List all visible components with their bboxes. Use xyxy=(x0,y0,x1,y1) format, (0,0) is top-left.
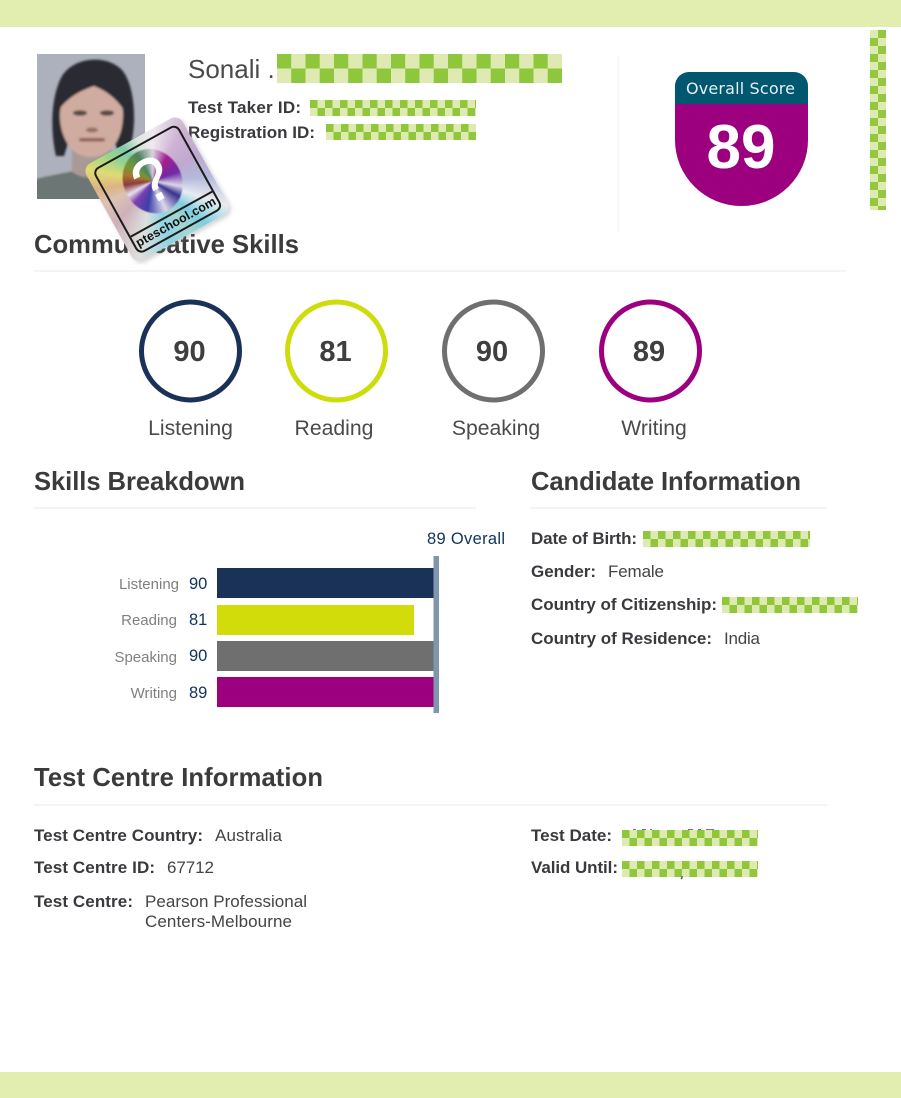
bottom band xyxy=(0,1072,901,1098)
candidate information details: Gender: xyxy=(531,562,596,581)
test centre details: Test Centre Country: xyxy=(34,826,203,845)
bar: writing: Writing xyxy=(131,685,177,702)
heading: skills breakdown: Skills Breakdown xyxy=(34,468,245,496)
test taker id: Test Taker ID: xyxy=(188,98,301,117)
test centre details: Pearson Professional xyxy=(145,892,307,911)
overall label: 89 Overall xyxy=(427,530,505,548)
candidate information details: Date of Birth: xyxy=(531,529,637,548)
photo: eyes and nose xyxy=(73,110,114,132)
bar: speaking: Speaking xyxy=(114,649,177,666)
test centre details: Test Centre ID: xyxy=(34,858,155,877)
score ring: speaking: 90 xyxy=(476,336,508,368)
bar: reading xyxy=(121,605,414,635)
score ring: listening: 90 xyxy=(173,336,206,368)
test dates: Test Date: xyxy=(531,826,612,845)
heading: communicative skills: Communicative Skills xyxy=(34,231,299,259)
test date redaction xyxy=(622,830,758,846)
test centre details: Centers-Melbourne xyxy=(145,912,292,931)
overall score badge xyxy=(675,72,808,206)
bar: listening xyxy=(119,568,434,598)
badge score: 89 xyxy=(707,113,775,182)
candidate information details: Country of Residence: xyxy=(531,629,712,648)
bar: speaking xyxy=(114,641,434,671)
candidate information details: Female xyxy=(608,562,664,581)
bar: listening: Listening xyxy=(119,576,179,593)
overall marker xyxy=(434,556,439,713)
bar: reading: 81 xyxy=(189,611,207,629)
test dates xyxy=(531,826,758,879)
candidate information details: Country of Citizenship: xyxy=(531,595,717,614)
photo: shirt xyxy=(37,170,100,199)
registration redaction xyxy=(326,124,476,140)
photo: neck xyxy=(72,150,112,178)
score ring: listening xyxy=(142,302,240,440)
score ring: writing: 89 xyxy=(633,336,665,368)
bar: writing: 89 xyxy=(189,684,207,702)
top band xyxy=(0,0,901,27)
photo: fringe xyxy=(60,82,124,108)
score ring: speaking: Speaking xyxy=(452,417,540,440)
valid until redaction xyxy=(622,861,758,877)
badge label: Overall Score xyxy=(686,79,795,98)
photo: face xyxy=(60,84,123,157)
citizenship redaction xyxy=(722,597,858,613)
bar: writing xyxy=(131,677,434,707)
holographic sticker xyxy=(82,114,232,264)
test taker redaction xyxy=(310,100,476,116)
test centre details: Test Centre: xyxy=(34,892,133,911)
bar chart: skills breakdown xyxy=(114,530,505,713)
heading: test centre information: Test Centre Information xyxy=(34,764,323,792)
bar: speaking: 90 xyxy=(189,647,207,665)
score ring: speaking xyxy=(444,302,542,440)
test centre details: Australia xyxy=(215,826,283,845)
right redaction strip xyxy=(870,30,886,210)
score ring: listening: Listening xyxy=(148,417,233,440)
score ring: writing: Writing xyxy=(621,417,687,440)
score ring: reading: 81 xyxy=(319,336,352,368)
test dates: Valid Until: xyxy=(531,858,618,877)
test centre details xyxy=(34,826,307,931)
candidate photo xyxy=(37,54,145,199)
heading: candidate information: Candidate Information xyxy=(531,468,801,496)
photo: mouth xyxy=(79,138,105,142)
bar: reading: Reading xyxy=(121,612,177,629)
score ring: reading: Reading xyxy=(295,417,373,440)
bar: listening: 90 xyxy=(189,575,207,593)
score ring: writing xyxy=(602,302,700,440)
photo: hair back xyxy=(52,60,134,158)
sticker question mark: ? xyxy=(121,142,184,219)
candidate name: Sonali . xyxy=(188,54,275,84)
sticker url strip: pteschool.com xyxy=(133,194,218,250)
candidate information details xyxy=(531,529,858,648)
score ring: reading xyxy=(288,302,386,440)
candidate information details: India xyxy=(724,629,761,648)
date of birth redaction xyxy=(643,531,810,547)
badge header xyxy=(675,72,808,104)
registration id: Registration ID: xyxy=(188,123,315,142)
name redaction xyxy=(277,54,562,83)
test centre details: 67712 xyxy=(167,858,214,877)
sticker disc xyxy=(111,138,194,224)
